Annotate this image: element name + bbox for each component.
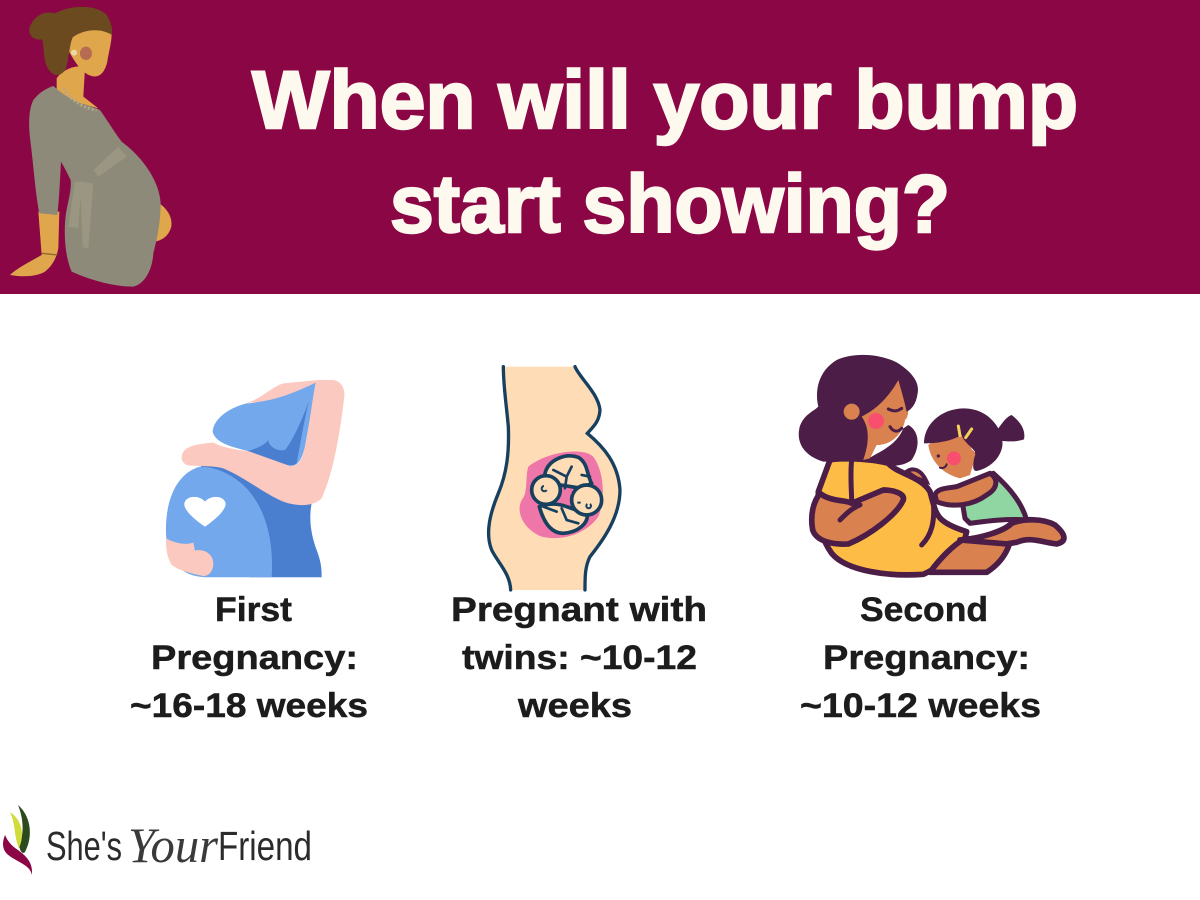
label: first pregnancy: First — [215, 591, 292, 629]
icon: mother with toddler — [799, 355, 1064, 575]
label: pregnant with twins: twins: ~10-12 — [462, 639, 697, 677]
logo: She's Your Friend: Your — [128, 817, 219, 873]
label: pregnant with twins: Pregnant with — [451, 591, 707, 629]
label: second pregnancy: Pregnancy: — [823, 639, 1030, 677]
illustration: pregnant woman in grey dress — [10, 7, 172, 287]
header banner — [0, 0, 1200, 294]
label: first pregnancy: Pregnancy: — [151, 639, 358, 677]
logo: She's Your Friend: Friend — [218, 823, 312, 869]
label: pregnant with twins — [451, 591, 707, 725]
icon: twins in womb — [489, 367, 620, 590]
label: pregnant with twins: weeks — [517, 687, 632, 725]
logo: She's Your Friend — [3, 805, 312, 875]
title: When will your bump — [252, 55, 1078, 146]
label: second pregnancy: Second — [860, 591, 988, 629]
label: first pregnancy: ~16-18 weeks — [130, 687, 368, 725]
title: start showing? — [390, 159, 950, 250]
label: second pregnancy: ~10-12 weeks — [800, 687, 1041, 725]
title — [252, 55, 1078, 250]
label: second pregnancy — [800, 591, 1041, 725]
logo: She's Your Friend: She's — [46, 823, 122, 869]
label: first pregnancy — [130, 591, 368, 725]
icon: first pregnancy belly — [166, 380, 344, 577]
